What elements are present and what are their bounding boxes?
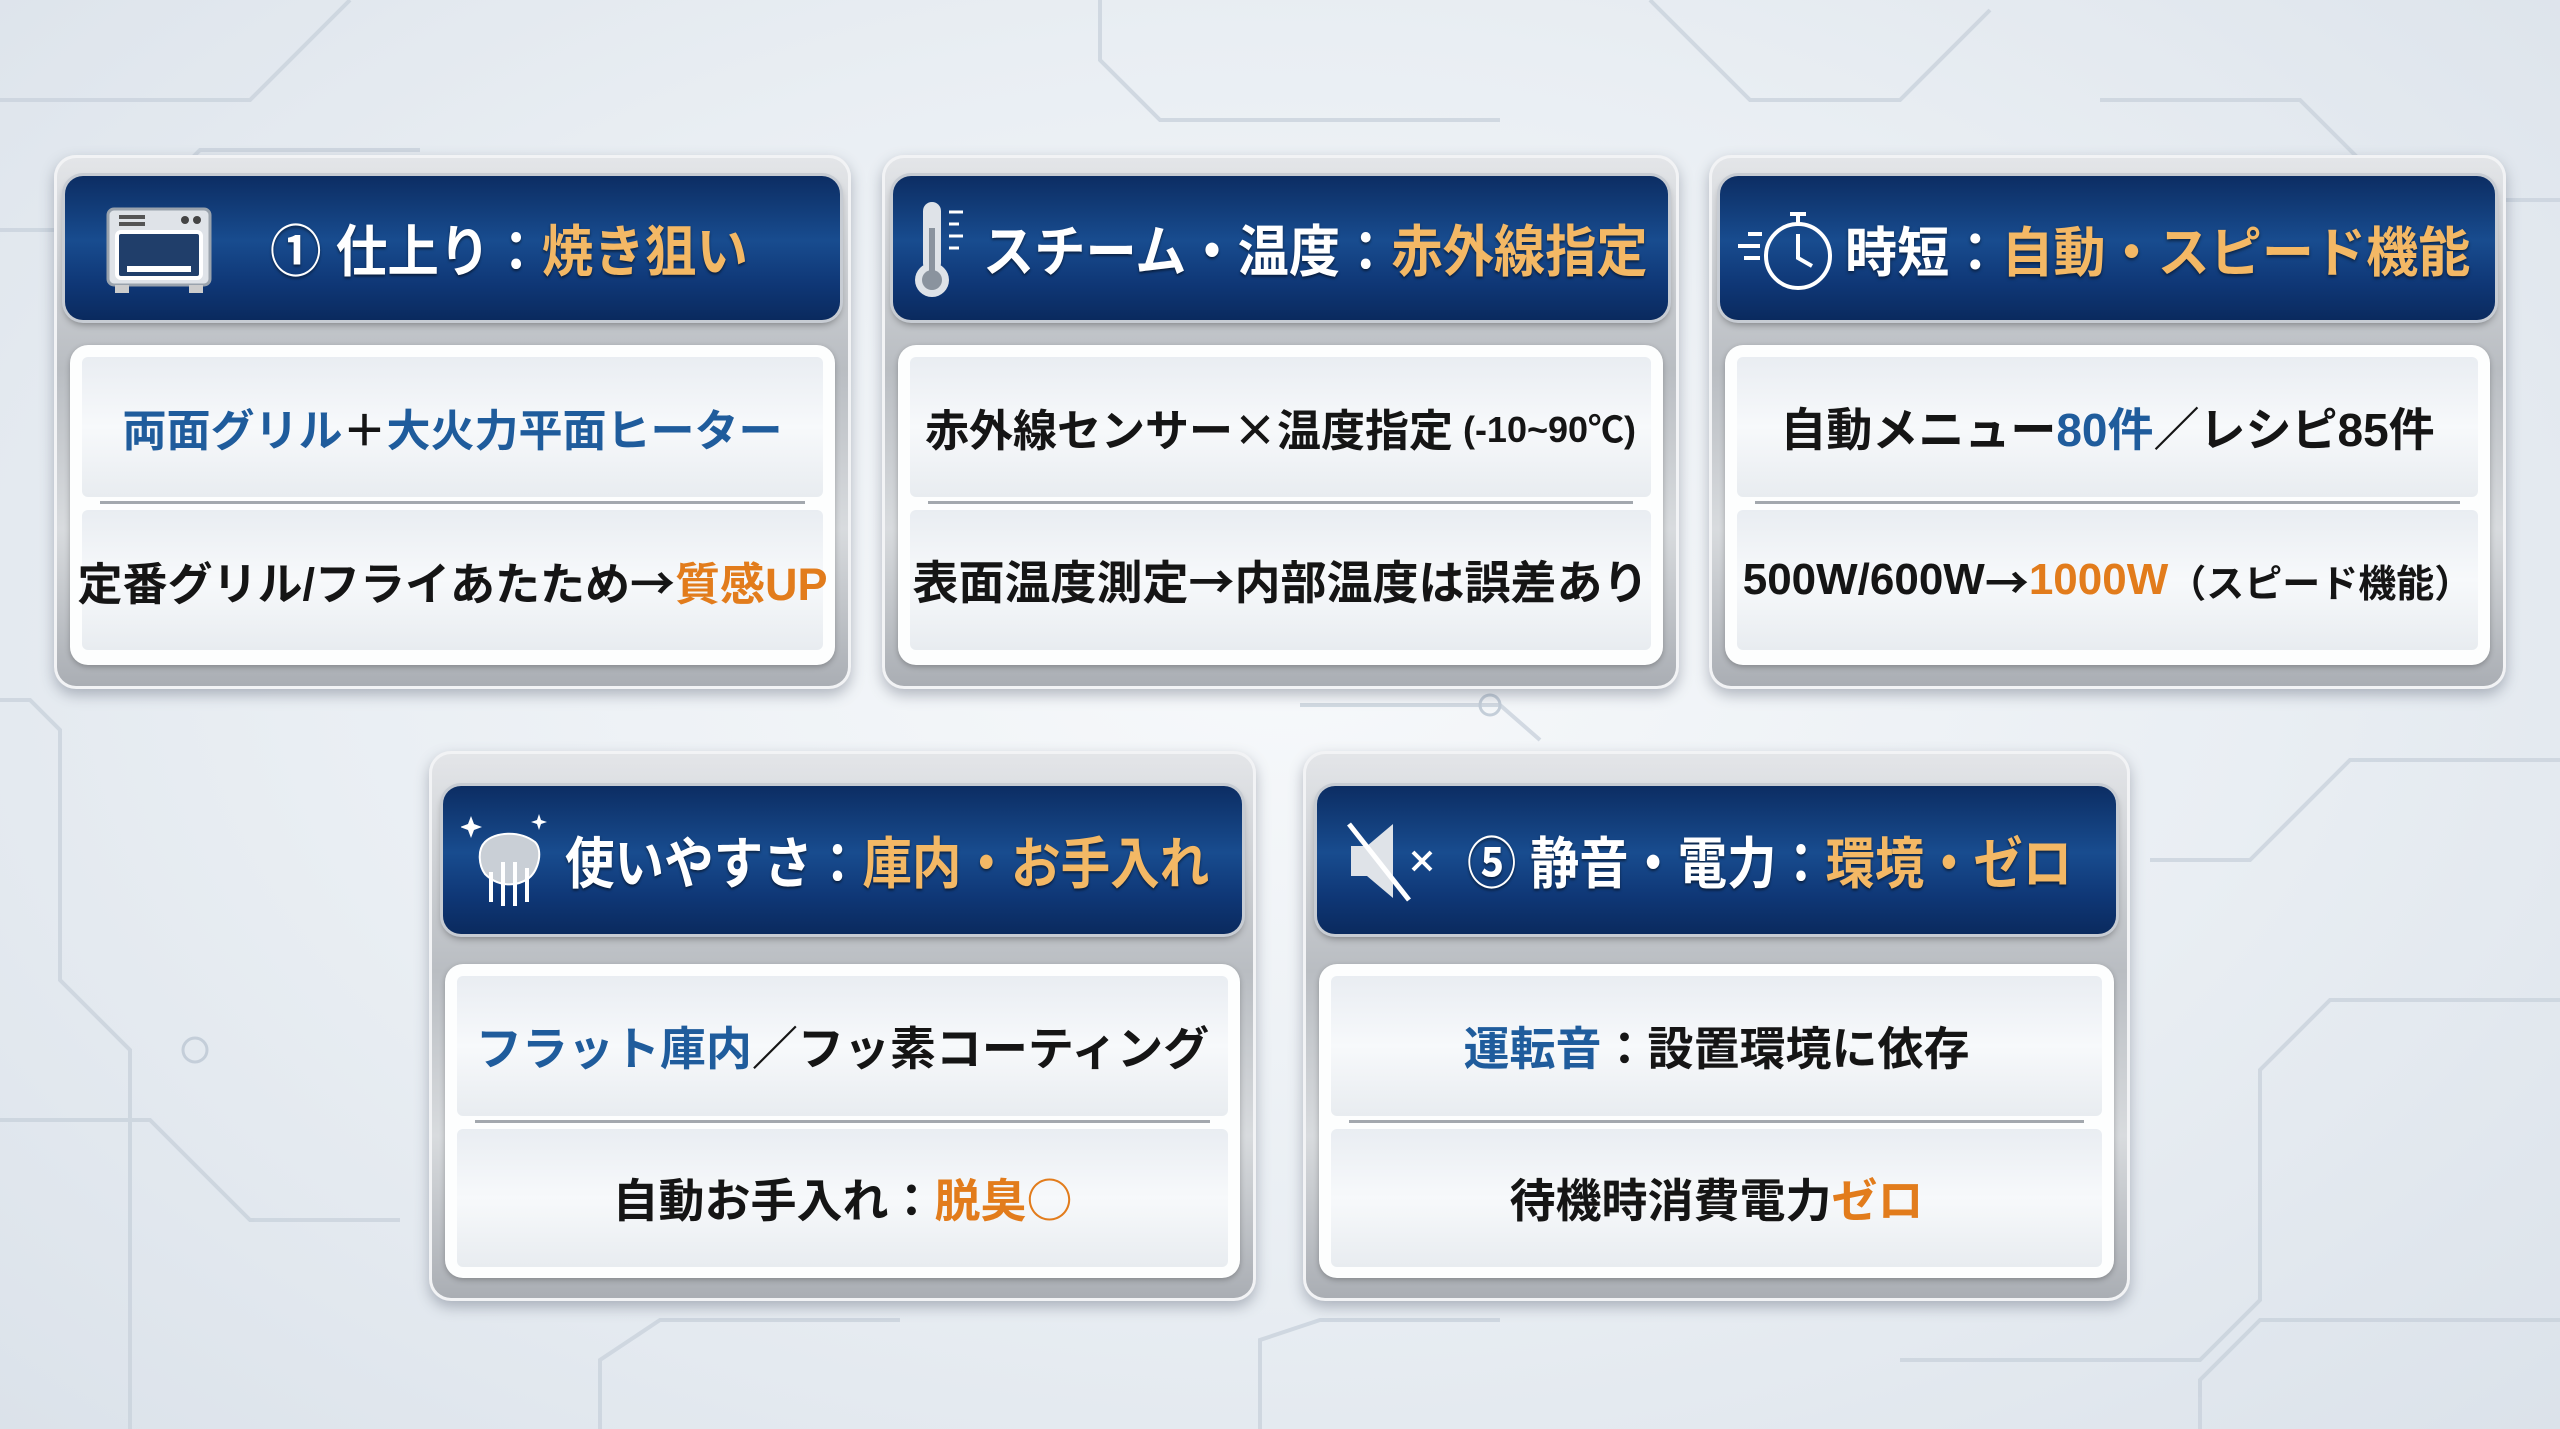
row 1 [910, 357, 1651, 497]
content card [445, 964, 1240, 1278]
row 2: ゼロ [1832, 1175, 1924, 1227]
row 1: × [1233, 395, 1277, 459]
header: 1 [65, 176, 840, 320]
row 1 [457, 976, 1228, 1116]
row 1: ＋ [342, 407, 386, 456]
icon: oven [106, 208, 212, 293]
header text: 使いやすさ：庫内・お手入れ [565, 832, 1209, 896]
row 1: フラット庫内 [476, 1023, 752, 1075]
panel: 4 usability [429, 751, 1256, 1301]
row 2: 500W/600W [1743, 555, 1985, 604]
icon: thermometer [915, 202, 963, 297]
row 2: 定番グリル/フライあたため [77, 558, 630, 610]
panel: 2 steam [882, 155, 1679, 689]
row 2: 質感UP [675, 558, 828, 610]
row 2: 待機時消費電力 [1510, 1175, 1832, 1227]
row 1 [82, 357, 823, 497]
row 1 [1737, 357, 2478, 497]
header: 2 [893, 176, 1668, 320]
row 2 [1737, 510, 2478, 650]
row 1: 赤外線センサー 温度指定 [925, 407, 1453, 456]
row 2: （スピード機能） [2168, 564, 2472, 606]
row 1: 80件 [2056, 404, 2154, 456]
icon: mute speaker [1347, 822, 1432, 902]
header: 4 [443, 786, 1242, 934]
row 2: → [1985, 548, 2029, 612]
panel: 3 time saving [1709, 155, 2506, 689]
row 2: → [630, 548, 675, 612]
panel: 1 finish [54, 155, 851, 689]
header text: 時短：自動・スピード機能 [1845, 224, 2470, 284]
header text: スチーム・温度：赤外線指定 [983, 220, 1648, 284]
row 1: ／フッ素コーティング [752, 1023, 1209, 1075]
header text: ⑤ 静音・電力：環境・ゼロ [1467, 832, 2072, 896]
header: 3 [1720, 176, 2495, 320]
header: 5 [1317, 786, 2116, 934]
icon: stopwatch [1738, 212, 1832, 290]
row 2 [910, 510, 1651, 650]
row 1 [1331, 976, 2102, 1116]
row 2: → [1188, 547, 1234, 613]
row 1: ：設置環境に依存 [1602, 1023, 1970, 1075]
row 1: (-10~90℃) [1463, 409, 1636, 450]
row 2 [82, 510, 823, 650]
row 1: 両面グリル 大火力平面ヒーター [122, 407, 782, 456]
content card [1319, 964, 2114, 1278]
row 2 [1331, 1129, 2102, 1267]
panel: 5 quiet power [1303, 751, 2130, 1301]
content card [898, 345, 1663, 665]
header text: ① 仕上り：焼き狙い [270, 220, 748, 284]
row 1: 運転音 [1464, 1023, 1602, 1075]
row 2: 1000W [2029, 555, 2168, 604]
row 2: 表面温度測定 内部温度は誤差あり [912, 557, 1648, 609]
icon: cleaning hand [461, 814, 547, 906]
row 2: 自動お手入れ： [612, 1175, 934, 1227]
row 2 [457, 1129, 1228, 1267]
content card [1725, 345, 2490, 665]
row 2: 脱臭○ [934, 1165, 1072, 1231]
row 1: 自動メニュー ／レシピ85件 [1780, 404, 2435, 456]
content card [70, 345, 835, 665]
